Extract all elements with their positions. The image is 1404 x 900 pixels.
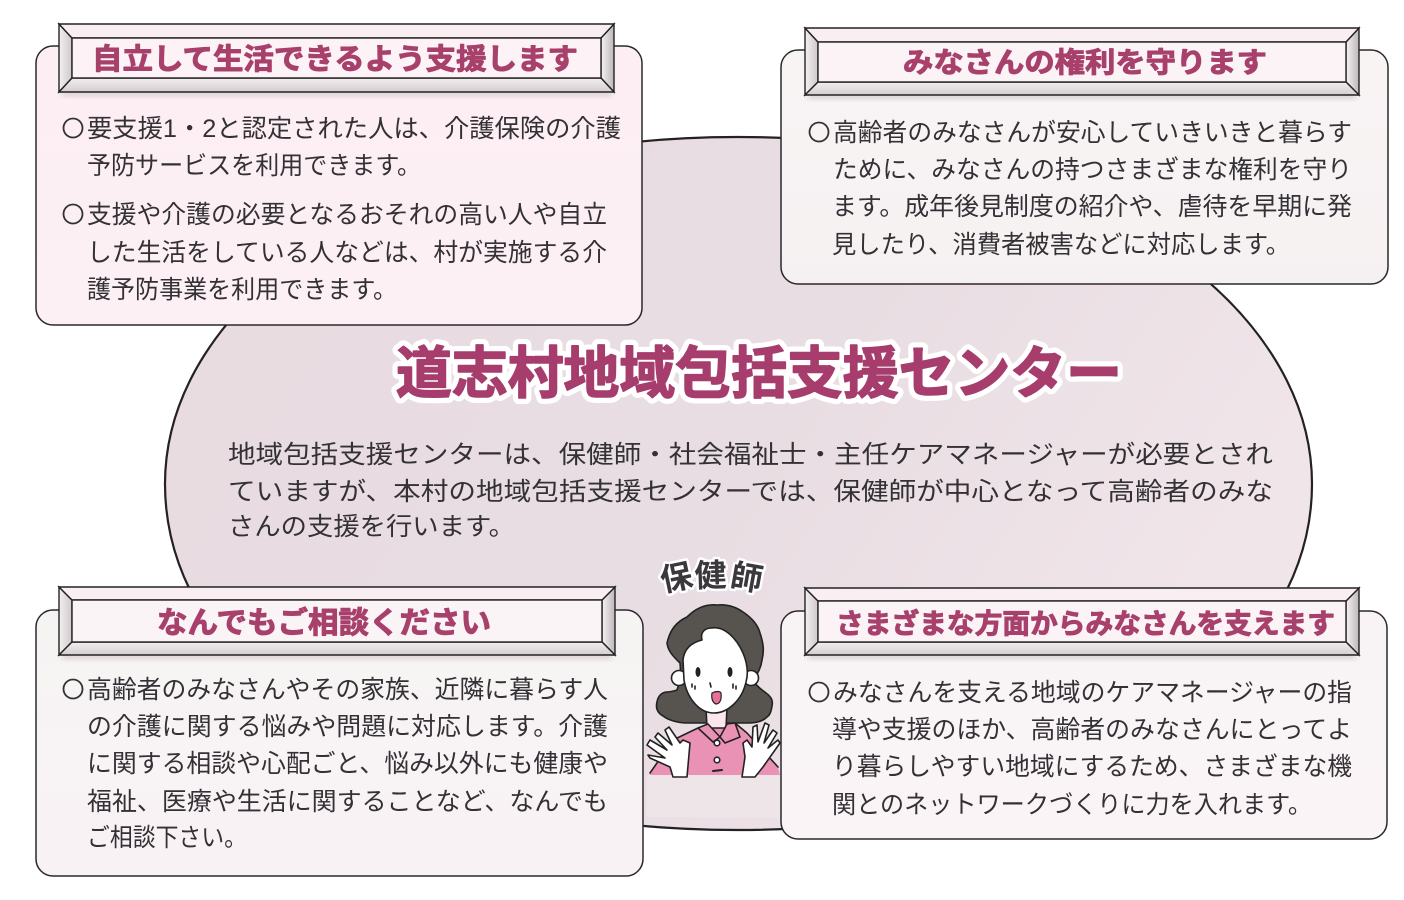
nurse label: 保: [657, 557, 696, 599]
center description text: [228, 441, 1273, 541]
panel body text: 高齢者のみなさんやその家族、近隣に暮らす人: [87, 676, 608, 704]
nurse label: 健: [694, 557, 727, 594]
panel: consultation: [36, 587, 643, 876]
panel body text: 福祉、医療や生活に関することなど、なんでも: [87, 788, 608, 816]
panel: protecting rights: [781, 28, 1388, 284]
pale area below figure: [647, 775, 780, 817]
eyes and mouth: [696, 667, 700, 677]
illustration: public health nurse: [647, 557, 780, 817]
center description text: ていますが、本村の地域包括支援センターでは、保健師が中心となって高齢者のみな: [228, 478, 1273, 506]
buttons: [714, 740, 720, 746]
panel body text: 支援や介護の必要となるおそれの高い人や自立: [87, 201, 607, 229]
title plate: みなさんの権利を守ります: [903, 47, 1267, 78]
panel body text: みなさんを支える地域のケアマネージャーの指: [833, 679, 1352, 707]
panel box: [781, 50, 1388, 284]
panel body text: ために、みなさんの持つさまざまな権利を守り: [833, 155, 1352, 184]
panel box: [781, 611, 1387, 839]
center description text: さんの支援を行います。: [228, 513, 515, 541]
figure: [647, 605, 780, 777]
panel body text: に関する相談や心配ごと、悩み以外にも健康や: [87, 750, 608, 778]
panel: independent living support: [36, 24, 642, 325]
hair: [657, 605, 772, 723]
title plate: [805, 28, 1359, 99]
panel body text: の介護に関する悩みや問題に対応します。介護: [87, 713, 608, 741]
panel body text: り暮らしやすい地域にするため、さまざまな機: [832, 752, 1352, 781]
title plate: なんでもご相談ください: [157, 606, 491, 640]
main title: 道志村地域包括支援センター: [396, 342, 1122, 405]
panel body text: 護予防事業を利用できます。: [87, 276, 397, 304]
face: [683, 628, 747, 713]
panel body text: [810, 679, 1352, 819]
panel body text: ご相談下さい。: [87, 824, 247, 852]
title plate: [59, 24, 614, 96]
panel body text: 導や支援のほか、高齢者のみなさんにとってよ: [832, 716, 1352, 744]
left hand: [647, 727, 690, 777]
panel body text: した生活をしている人などは、村が実施する介: [87, 239, 607, 267]
title plate: [59, 587, 615, 659]
title plate: 自立して生活できるよう支援します: [92, 43, 578, 76]
panel body text: 高齢者のみなさんが安心していきいきと暮らす: [833, 119, 1352, 147]
panel: support from many directions: [781, 588, 1387, 839]
central oval background: [165, 137, 1312, 830]
shirt: [650, 723, 780, 775]
title plate: [805, 588, 1359, 659]
center description text: 地域包括支援センターは、保健師・社会福祉士・主任ケアマネージャーが必要とされ: [228, 441, 1273, 469]
ears: [672, 670, 686, 686]
panel body text: [64, 676, 608, 852]
title plate: さまざまな方面からみなさんを支えます: [836, 608, 1335, 639]
nurse label: [657, 557, 766, 599]
panel body text: ます。成年後見制度の紹介や、虐待を早期に発: [832, 193, 1352, 221]
panel box: [36, 46, 642, 325]
neck: [706, 708, 727, 728]
right hand: [742, 723, 780, 777]
main title: 道志村地域包括支援センター: [396, 342, 1122, 405]
panel box: [36, 610, 643, 876]
collar: [698, 724, 720, 742]
panel body text: 関とのネットワークづくりに力を入れます。: [832, 791, 1312, 819]
panel body text: 見したり、消費者被害などに対応します。: [832, 231, 1290, 259]
panel body text: 要支援1・2と認定された人は、介護保険の介護: [87, 115, 621, 143]
nurse label: 師: [728, 557, 766, 598]
panel body text: 予防サービスを利用できます。: [87, 152, 421, 180]
panel body text: [64, 115, 621, 304]
panel body text: [810, 119, 1352, 259]
